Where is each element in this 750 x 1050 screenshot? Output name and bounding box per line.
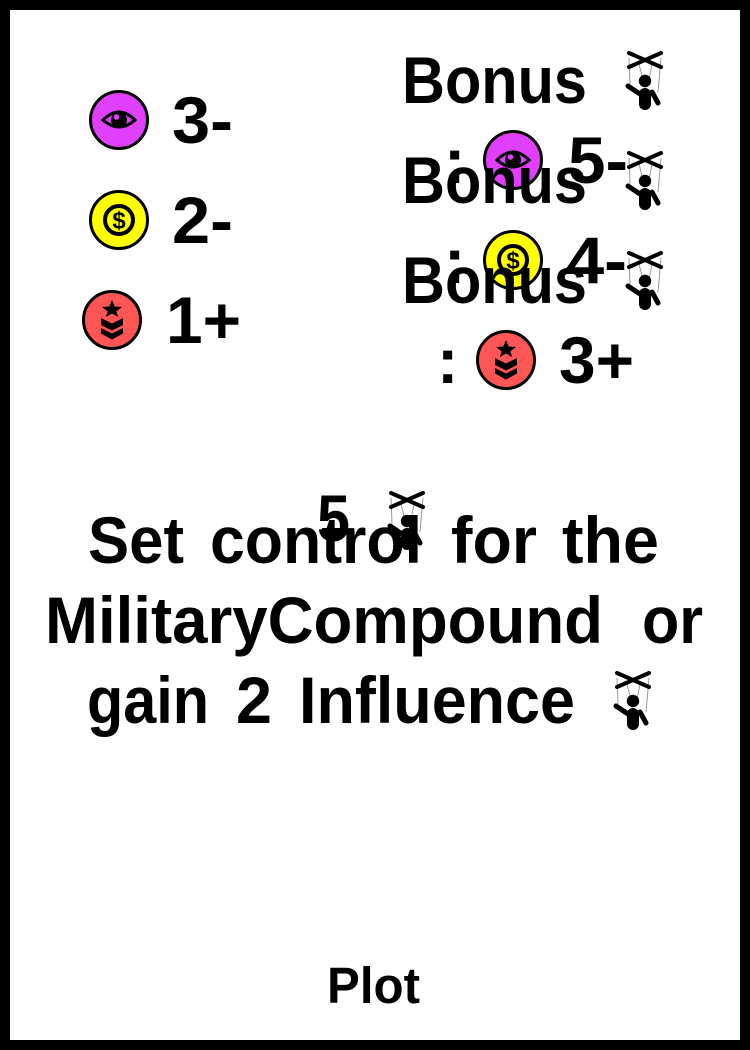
main effect text: Set (88, 503, 184, 577)
icon: puppet (628, 53, 661, 104)
heading: Bonus: Bonus (402, 243, 587, 317)
icon: rank insignia (84, 292, 140, 348)
label: 3+: 3+ (559, 323, 634, 397)
main effect text: for (451, 503, 537, 577)
number 5: 5 (317, 481, 350, 555)
influence cost: 5 (317, 481, 423, 555)
colon: : (444, 125, 465, 197)
heading: Bonus: Bonus (402, 143, 587, 217)
label: 2-: 2- (172, 183, 233, 257)
icon: eye (484, 132, 542, 188)
footer label: Plot: Plot (327, 957, 420, 1014)
main effect text: Influence (299, 663, 575, 737)
main effect text (45, 503, 703, 737)
label: 5-: 5- (568, 123, 628, 197)
cost row: money 2- (90, 183, 233, 257)
main effect text: the (562, 503, 659, 577)
icon: puppet (390, 493, 423, 544)
label: 4-: 4- (566, 223, 627, 297)
icon: puppet (628, 153, 661, 204)
cost row: military 1+ (84, 283, 241, 357)
bonus row: military 3+ (402, 243, 661, 397)
main effect text: 2 (236, 663, 272, 737)
colon: : (444, 225, 465, 297)
main effect text: control (210, 503, 422, 577)
icon: eye (90, 92, 148, 148)
bonus row: money 4- (402, 143, 661, 297)
colon: : (437, 325, 458, 397)
icon: coin (484, 232, 542, 288)
cost row: influence 3- (90, 83, 233, 157)
icon: puppet (628, 253, 661, 304)
icon: puppet (616, 673, 649, 724)
main effect text: gain (87, 663, 209, 737)
main effect text: or (642, 583, 703, 657)
label: 1+: 1+ (166, 283, 241, 357)
icon: coin (90, 192, 148, 248)
heading: Bonus: Bonus (402, 43, 587, 117)
icon: rank insignia (478, 332, 534, 388)
label: 3-: 3- (172, 83, 233, 157)
bonus row: influence 5- (402, 43, 661, 197)
main effect text: MilitaryCompound (45, 583, 603, 657)
